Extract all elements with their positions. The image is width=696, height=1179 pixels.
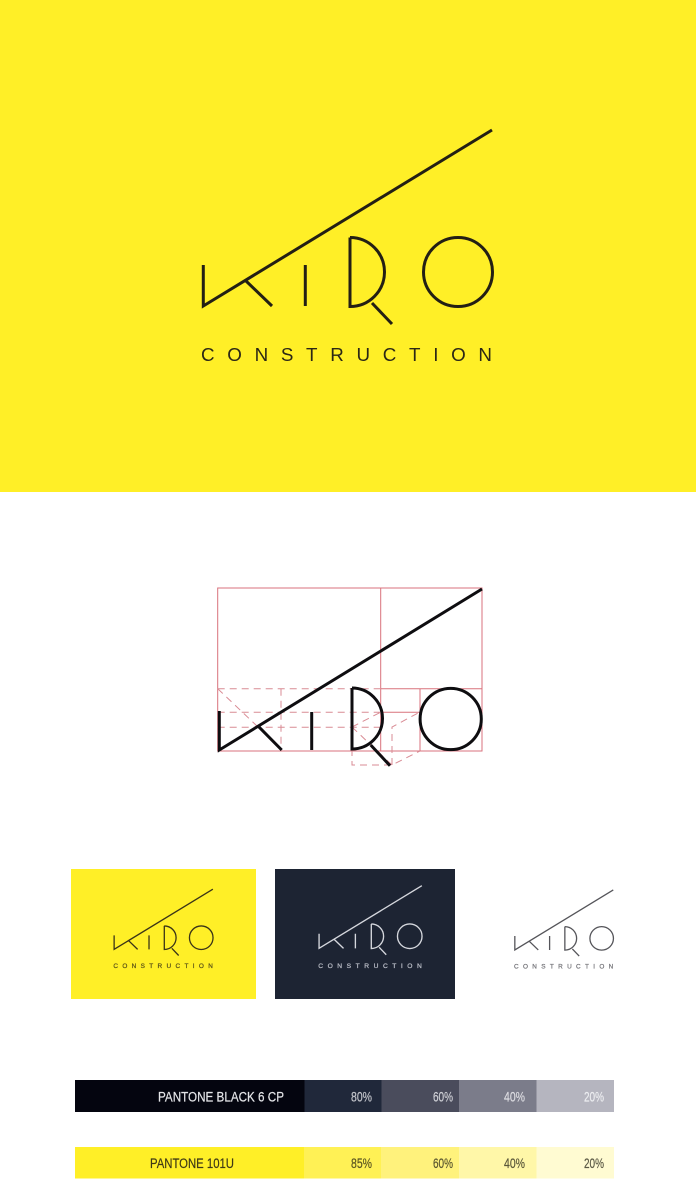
colour bar: Pantone 101 U tints: 85% (351, 1156, 372, 1171)
logo letter K with long diagonal (203, 130, 492, 306)
colour bar: Pantone Black 6 CP tints (75, 1080, 614, 1112)
panel: navy logo variant (275, 869, 455, 999)
panel: logo on white: CONSTRUCTION (514, 964, 614, 971)
logo tagline: CONSTRUCTION (201, 344, 492, 365)
panel: yellow logo variant (71, 869, 256, 999)
colour bar: Pantone 101 U tints: PANTONE 101U (150, 1156, 234, 1171)
panel: logo on white (514, 890, 614, 971)
construction grid diagram (218, 588, 482, 766)
colour bar: Pantone Black 6 CP tints: 40% (504, 1090, 525, 1104)
colour bar: Pantone 101 U tints: 40% (504, 1156, 525, 1171)
logo letter R (350, 238, 392, 324)
panel: yellow hero background (0, 0, 696, 492)
colour bar: Pantone Black 6 CP tints: 20% (584, 1090, 604, 1104)
logo letter O (424, 238, 492, 306)
colour bar: Pantone 101 U tints: 60% (433, 1156, 453, 1171)
logo on navy: CONSTRUCTION (318, 963, 422, 970)
colour bar: Pantone Black 6 CP tints: 60% (433, 1090, 453, 1104)
hero logo: KIRO Construction (201, 130, 492, 365)
red dashed guide lines (218, 689, 420, 765)
red solid grid lines (218, 588, 482, 751)
navy card (275, 869, 455, 999)
yellow card (71, 869, 256, 999)
logo on navy (318, 886, 422, 970)
colour bar: Pantone Black 6 CP tints: 80% (351, 1090, 372, 1104)
grid logo: KIRO mark (219, 589, 482, 766)
logo on yellow: CONSTRUCTION (113, 963, 213, 970)
colour bar: Pantone 101 U tints: 20% (584, 1156, 604, 1171)
logo on yellow (113, 889, 213, 970)
colour bar: Pantone 101 U tints (75, 1147, 614, 1178)
logo letter I (304, 265, 307, 306)
colour bar: Pantone Black 6 CP tints: PANTONE BLACK 6 CP (158, 1090, 284, 1104)
